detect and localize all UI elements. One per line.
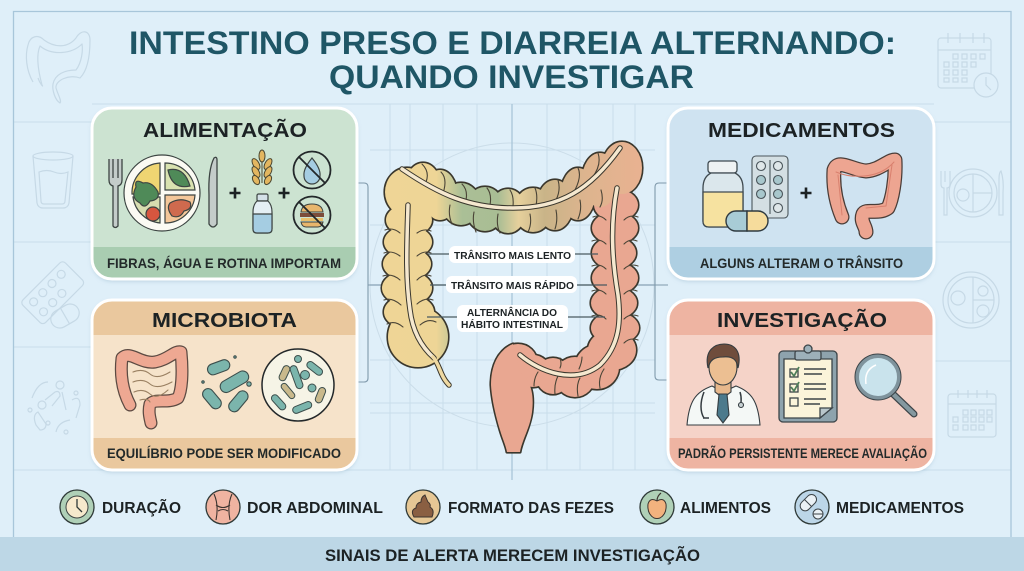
colon fill <box>382 142 642 452</box>
caption: ALGUNS ALTERAM O TRÂNSITO <box>700 254 903 271</box>
plus <box>800 188 812 198</box>
icon: no burger <box>294 196 330 234</box>
icon: wheat <box>250 150 274 186</box>
plus <box>278 188 290 198</box>
caption: PADRÃO PERSISTENTE MERECE AVALIAÇÃO <box>678 444 927 461</box>
background icon: divided plate <box>943 272 999 328</box>
background icon: microbes <box>28 381 80 434</box>
label: alternating bowel habit <box>457 305 568 332</box>
icon: bacteria <box>200 356 251 414</box>
labels on colon <box>427 246 607 332</box>
heading: MICROBIOTA <box>152 310 297 332</box>
heading: MEDICAMENTOS <box>708 120 895 142</box>
item: formato das fezes <box>406 490 614 524</box>
heading: INVESTIGAÇÃO <box>717 309 887 332</box>
item: alimentos: ALIMENTOS <box>680 500 771 517</box>
colon silhouette outline <box>382 142 642 452</box>
background icon: calendar <box>948 390 996 437</box>
icon: petri dish <box>262 349 334 421</box>
large colon illustration <box>382 142 642 452</box>
panel: alimentação <box>92 108 357 279</box>
icon: magnifying glass <box>855 354 914 414</box>
title <box>129 25 896 95</box>
icon: doctor <box>687 344 760 425</box>
item: duração: DURAÇÃO <box>102 497 181 517</box>
footer banner <box>0 537 1024 571</box>
connector: right bracket <box>637 183 668 380</box>
icon: medicine bottle <box>703 161 743 227</box>
label: slower transit <box>449 246 575 263</box>
item: dor abdominal: DOR ABDOMINAL <box>247 500 383 517</box>
icon: knife <box>209 157 217 227</box>
caption: FIBRAS, ÁGUA E ROTINA IMPORTAM <box>107 255 341 271</box>
background icon: colon <box>26 32 90 103</box>
caption: EQUILÍBRIO PODE SER MODIFICADO <box>107 445 341 461</box>
item: formato das fezes: FORMATO DAS FEZES <box>448 500 614 517</box>
background icon: plate and cutlery <box>941 169 1003 217</box>
label: slower transit: TRÂNSITO MAIS LENTO <box>454 249 571 262</box>
footer banner: SINAIS DE ALERTA MERECEM INVESTIGAÇÃO <box>325 545 700 565</box>
heading: ALIMENTAÇÃO <box>143 119 307 142</box>
panel: medicamentos <box>668 108 934 279</box>
background icon: blister pack and capsule <box>20 260 85 331</box>
panel: investigação <box>668 300 934 470</box>
inner band <box>402 148 620 375</box>
background icon: calendar with clock <box>938 33 998 97</box>
item: medicamentos <box>795 490 964 524</box>
icon: colon with intestines <box>121 352 182 423</box>
icon: small colon <box>834 160 895 232</box>
icon: fork <box>109 159 122 228</box>
item: dor abdominal <box>206 490 383 524</box>
label: alternating bowel habit: ALTERNÂNCIA DO <box>467 306 557 319</box>
item: medicamentos: MEDICAMENTOS <box>836 500 964 517</box>
background icon: glass of water <box>33 152 73 208</box>
icon: clipboard checklist <box>779 345 837 422</box>
item: alimentos <box>640 490 771 524</box>
icon: plate <box>124 155 200 231</box>
haustral folds <box>383 153 638 396</box>
icon: capsule <box>726 211 768 231</box>
icon: no water <box>294 152 330 188</box>
plus <box>230 188 240 198</box>
panel: microbiota <box>92 300 357 470</box>
label: alternating bowel habit: HÁBITO INTESTINAL <box>461 318 563 331</box>
appendix <box>433 357 449 385</box>
item: duração <box>60 490 181 524</box>
title: QUANDO INVESTIGAR <box>329 59 694 95</box>
icon: water bottle <box>253 194 272 233</box>
label: faster transit: TRÂNSITO MAIS RÁPIDO <box>451 279 574 292</box>
connector: left bracket <box>358 183 386 382</box>
label: faster transit <box>446 276 577 293</box>
icon: blister pack <box>752 156 788 218</box>
title: INTESTINO PRESO E DIARREIA ALTERNANDO: <box>129 25 896 61</box>
